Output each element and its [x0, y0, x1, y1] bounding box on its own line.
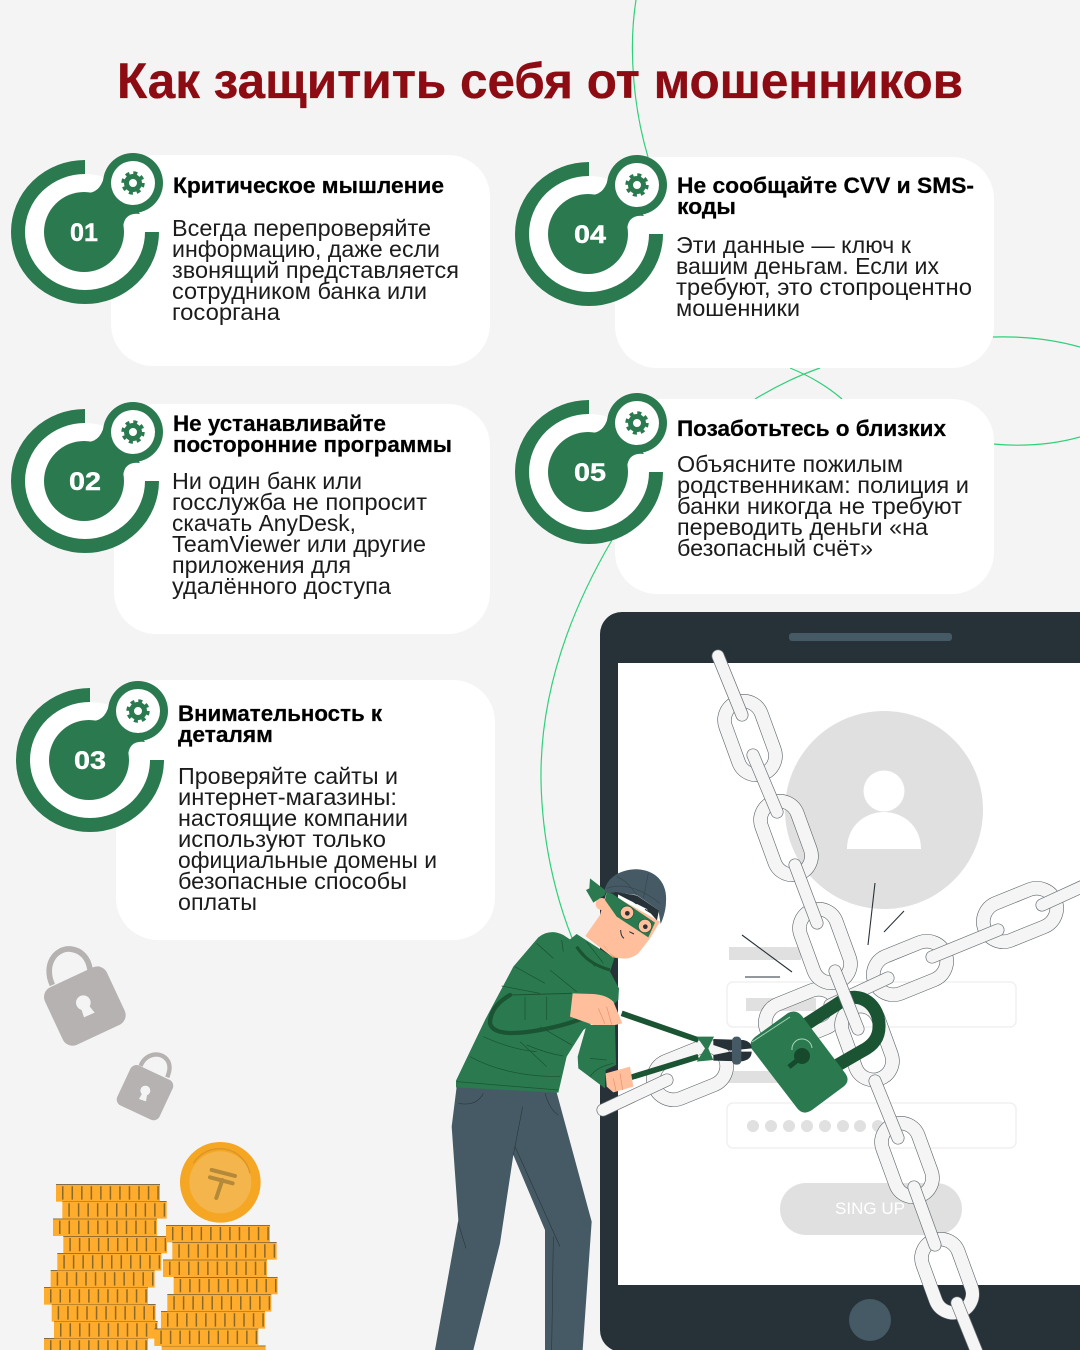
- text 02: приложения для: [172, 552, 351, 578]
- heading 03: [178, 701, 383, 747]
- thief illustration: [435, 869, 752, 1350]
- text 05: родственникам: полиция и: [677, 472, 969, 498]
- badge 01: 01: [70, 219, 98, 247]
- bolt cutter: [622, 1013, 752, 1077]
- text 03: оплаты: [178, 889, 257, 915]
- panel: card 03: [23, 680, 495, 940]
- text 05: банки никогда не требуют: [677, 493, 962, 519]
- hair and brows: [615, 892, 658, 919]
- cheek shadow: [603, 943, 620, 959]
- chain: bars of diagonal: [718, 656, 982, 1350]
- badge 01: [18, 153, 163, 297]
- panel: card 02: [18, 402, 490, 634]
- heading 02: посторонние программы: [173, 432, 452, 457]
- text 05: [677, 451, 969, 561]
- login form: [727, 947, 1016, 1148]
- heading 02: Не устанавливайте: [173, 411, 386, 436]
- badge 05: 05: [574, 459, 606, 487]
- heading 04: коды: [677, 194, 736, 219]
- speaker: [789, 633, 952, 641]
- badge 02: 02: [69, 468, 101, 496]
- text 02: удалённого доступа: [172, 573, 391, 599]
- text 05: безопасный счёт»: [677, 535, 873, 561]
- right coin stack: [154, 1225, 278, 1350]
- text 03: используют только: [178, 826, 386, 852]
- front hand: [570, 993, 622, 1025]
- text 04: [676, 232, 972, 321]
- panel: card 01: [18, 153, 490, 366]
- text 01: Всегда перепроверяйте: [172, 215, 431, 241]
- heading 02: [173, 411, 452, 457]
- sign up button: SING UP: [835, 1200, 905, 1218]
- heading 03: деталям: [178, 722, 273, 747]
- text 04: мошенники: [676, 295, 800, 321]
- text 04: вашим деньгам. Если их: [676, 253, 939, 279]
- finger lines: [598, 1007, 623, 1091]
- text 01: звонящий представляется: [172, 257, 459, 283]
- tablet device: [600, 612, 1080, 1350]
- text 03: официальные домены и: [178, 847, 437, 873]
- icon: small grey padlock: [115, 1054, 175, 1122]
- text 01: госоргана: [172, 299, 280, 325]
- sweater: [456, 932, 619, 1093]
- arm shadow: [490, 995, 587, 1033]
- sign up button: [780, 1183, 962, 1235]
- text 04: Эти данные — ключ к: [676, 232, 912, 258]
- text 02: [172, 468, 427, 599]
- avatar: [785, 711, 983, 909]
- heading 05: Позаботьтесь о близких: [677, 416, 946, 441]
- text 01: информацию, даже если: [172, 236, 440, 262]
- badge 04: 04: [574, 221, 606, 249]
- text 02: госслужба не попросит: [172, 489, 427, 515]
- text 03: настоящие компании: [178, 805, 408, 831]
- collar shadow: [577, 947, 610, 970]
- text 04: требуют, это стопроцентно: [676, 274, 972, 300]
- leg folds: [458, 1093, 560, 1350]
- text 03: [178, 763, 437, 915]
- title: Как защитить себя от мошенников: [117, 53, 963, 109]
- smile: [621, 930, 634, 938]
- text 03: безопасные способы: [178, 868, 407, 894]
- heading 04: Не сообщайте CVV и SMS-: [677, 173, 974, 198]
- badge 04: [522, 155, 667, 299]
- panel: card 05: [522, 393, 994, 594]
- mask: [586, 878, 655, 937]
- text 01: [172, 215, 459, 325]
- badge 05: [522, 393, 667, 537]
- badge 03: 03: [74, 747, 106, 775]
- green padlock: [750, 997, 879, 1113]
- impact lines: [742, 883, 904, 977]
- text 01: сотрудником банка или: [172, 278, 427, 304]
- text 05: переводить деньги «на: [677, 514, 928, 540]
- badge 02: [18, 402, 163, 546]
- badge 03: [23, 681, 168, 825]
- chain: horizontal: [603, 882, 1080, 1110]
- text 02: TeamViewer или другие: [172, 531, 426, 557]
- icon: coin stacks: [44, 1142, 278, 1350]
- text 03: интернет-магазины:: [178, 784, 397, 810]
- left coin stack: [44, 1184, 167, 1350]
- icon: large grey padlock: [40, 949, 129, 1049]
- sweater folds: [457, 940, 613, 1090]
- legs: [435, 1087, 592, 1350]
- decorative green lines: [541, 0, 1080, 938]
- neck and face: [585, 892, 660, 959]
- far arm: [578, 1025, 616, 1088]
- text 02: скачать AnyDesk,: [172, 510, 356, 536]
- hat: [604, 869, 666, 924]
- rear hand: [606, 1067, 633, 1092]
- text 03: Проверяйте сайты и: [178, 763, 398, 789]
- ear: [596, 898, 608, 910]
- text 05: Объясните пожилым: [677, 451, 903, 477]
- heading 01: Критическое мышление: [173, 173, 444, 198]
- hat seams: [607, 873, 660, 903]
- panel: card 04: [522, 155, 994, 368]
- home button: [849, 1299, 891, 1341]
- heading 03: Внимательность к: [178, 701, 383, 726]
- text 02: Ни один банк или: [172, 468, 362, 494]
- chain: rings of diagonal: [719, 696, 978, 1318]
- icon: tenge coin: [180, 1142, 261, 1223]
- heading 04: [677, 173, 974, 219]
